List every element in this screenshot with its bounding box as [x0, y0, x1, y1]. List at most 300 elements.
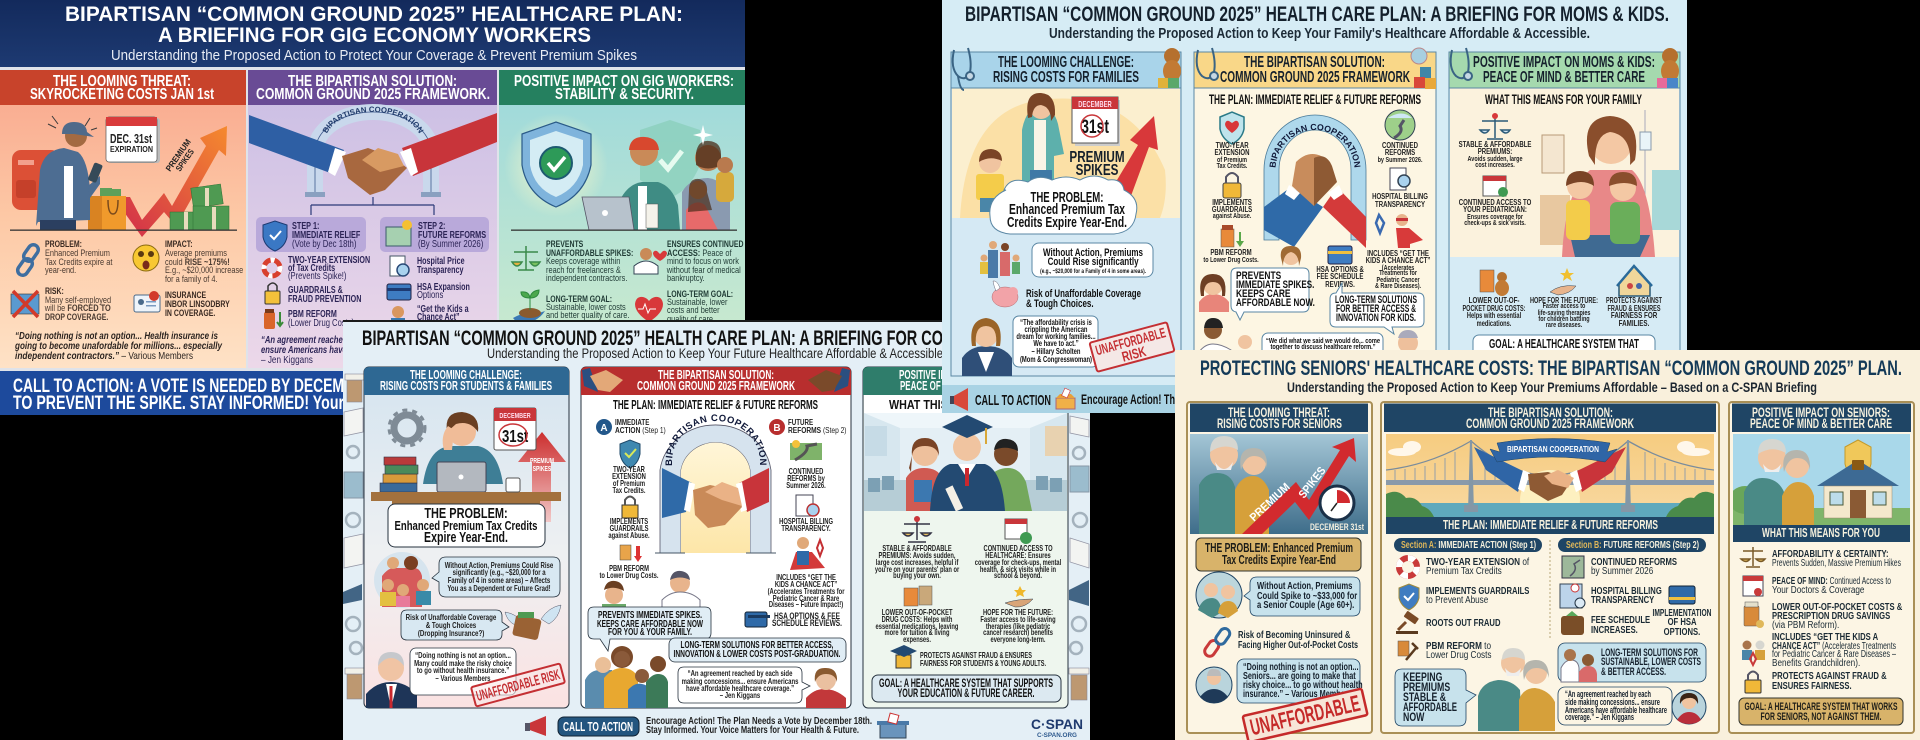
panel: looming challenge	[364, 367, 569, 708]
callout: without action: significantly (e.g., ~$20,000 for a	[453, 567, 546, 577]
icon: pill bottle and coffee	[904, 586, 932, 606]
illustration: clasped hands under arch: BIPARTISAN COOPERATION	[1270, 124, 1360, 168]
plan heading bar: THE PLAN: IMMEDIATE RELIEF & FUTURE REFORMS	[1443, 517, 1658, 532]
reforms right column: TRANSPARENCY	[1375, 199, 1425, 209]
stamp: unaffordable: UNAFFORDABLE	[1248, 690, 1362, 740]
left reform list: PBM REFORM	[288, 308, 337, 319]
title: BIPARTISAN “COMMON GROUND 2025” HEALTH CARE PLAN: A BRIEFING FOR CO	[362, 327, 943, 350]
panel heading: THE LOOMING THREAT:	[53, 73, 191, 90]
callout: long-term solutions: FOR BETTER ACCESS &	[1336, 303, 1416, 315]
badge A: ACTION (Step 1)	[615, 425, 666, 435]
illustration: mom hugging kids in clinic	[1540, 110, 1680, 257]
icon: calendar check	[1005, 519, 1032, 544]
illustration: handshake under cooperation arch	[249, 104, 497, 215]
callout: keeping premiums stable: AFFORDABLE	[1403, 700, 1457, 714]
goal box	[1473, 335, 1655, 375]
text block: problem, impact, risk, insurance: Many self-employed	[45, 294, 111, 305]
benefits text: LONG-TERM GOAL:	[667, 288, 733, 299]
text: hsa options: SCHEDULE REVIEWS.	[772, 618, 842, 628]
quote bubble: risky choice... to go without health	[1243, 679, 1363, 690]
text: risk: Facing Higher Out-of-Pocket Costs	[1238, 639, 1358, 651]
callout: without action: Family of 4 in some areas) – Affects	[448, 575, 550, 585]
left reform list: TWO-YEAR EXTENSION	[288, 254, 370, 265]
reforms left column: against Abuse.	[608, 532, 650, 540]
quote bubble: Many could make the risky choice	[414, 658, 512, 668]
illustration: boy and doctor	[602, 571, 700, 611]
quote bubble: Americans have affordable healthcare	[1565, 705, 1667, 715]
reforms left column: GUARDRAILS	[1212, 204, 1252, 214]
callout: long-term solutions	[1558, 643, 1706, 682]
subheading: WHAT THIS MEANS FOR YOU	[889, 397, 1041, 412]
illustration: smiling senior couple	[1478, 648, 1555, 731]
illustration: stressed student at desk: SPIKES	[533, 465, 551, 473]
benefits text: mind to focus on work	[667, 255, 740, 266]
future reforms list: HOSPITAL BILLING	[1591, 585, 1662, 596]
benefits text: costs and better	[667, 304, 720, 315]
icon: hsa cards	[745, 612, 770, 627]
plan heading: THE PLAN: IMMEDIATE RELIEF & FUTURE REFORMS	[613, 397, 818, 412]
subtitle: Understanding the Proposed Action to Keep Your Future Healthcare Affordable & Accessible	[487, 346, 943, 361]
panel: looming threat	[1187, 402, 1372, 740]
icon: flying piggy bank	[992, 281, 1018, 307]
step 1 box	[256, 217, 366, 252]
panel: positive impact	[1729, 402, 1914, 733]
icon: scales	[1741, 547, 1765, 567]
call to action text: Stay Informed. Your Voice Matters for Your Health & Future.	[646, 725, 859, 736]
quote bubble: Seniors... are going to make that	[1243, 670, 1356, 681]
problem callout: Expire Year-End.	[424, 529, 508, 545]
illustration: shield and gig worker family	[504, 113, 737, 231]
icon: megaphone	[950, 388, 968, 411]
icon: padlock	[1223, 173, 1241, 198]
callout: prevents immediate spikes: AFFORDABLE NOW.	[1236, 297, 1315, 309]
panel heading: POSITIVE IMPACT ON GIG WORKERS:	[514, 73, 734, 90]
panel heading: RISING COSTS FOR FAMILIES	[993, 69, 1139, 86]
step 2 box: FUTURE REFORMS	[418, 229, 486, 240]
callout: prevents immediate spikes: KEEPS CARE AFFORDABLE NOW	[597, 619, 703, 630]
text block: problem, impact, risk, insurance: Average premiums	[165, 247, 227, 258]
icon: header handshake left	[582, 368, 623, 392]
benefits in blue panel: FAIRNESS FOR	[1611, 310, 1658, 320]
callout: keeping premiums stable	[1395, 669, 1476, 726]
icon: superhero with ribbon	[1376, 214, 1423, 248]
reforms left column: Tax Credits.	[613, 487, 646, 495]
callout: prevents immediate spikes: PREVENTS	[1236, 270, 1281, 282]
illustration: mom portrait	[1199, 274, 1229, 312]
text block: problem, impact, risk, insurance: could RISE ~175%!	[165, 256, 230, 267]
title banner: BIPARTISAN “COMMON GROUND 2025” HEALTHCARE PLAN:	[65, 3, 683, 26]
future reforms list: FEE SCHEDULE	[1591, 614, 1650, 625]
illustration: worried seniors and premium spike arrow	[1190, 434, 1368, 534]
title banner: A BRIEFING FOR GIG ECONOMY WORKERS	[158, 24, 591, 47]
illustration: doctor	[1272, 246, 1309, 300]
icon: senior couple portrait	[1196, 572, 1242, 618]
quote: independent contractors.” – Various Members	[15, 350, 193, 362]
immediate action list: ROOTS OUT FRAUD	[1426, 617, 1501, 628]
panel heading	[1750, 405, 1892, 431]
illustration: worried seniors and premium spike arrow: SPIKES	[1297, 465, 1329, 501]
callout: long-term solutions	[669, 638, 846, 662]
icon: wallet	[1561, 611, 1584, 635]
reforms left column: GUARDRAILS	[610, 525, 649, 533]
reforms left column: EXTENSION	[612, 473, 646, 481]
calendar: 31st	[1081, 116, 1109, 138]
quote bubble: “Doing nothing is not an option...	[1243, 661, 1358, 672]
problem box: THE PROBLEM: Enhanced Premium	[1205, 540, 1353, 555]
left reform list	[264, 254, 370, 329]
icon: ballot box	[877, 713, 909, 738]
stamp: unaffordable risk: UNAFFORDABLE RISK	[475, 667, 562, 705]
problem box	[1196, 538, 1361, 571]
panel: bipartisan solution	[248, 70, 497, 368]
callout: without action: Without Action, Premiums	[1043, 247, 1143, 259]
calendar: EXPIRATION	[110, 144, 153, 154]
text block: problem, impact, risk, insurance: DROP COVERAGE.	[45, 311, 108, 322]
badge A: A	[600, 423, 608, 434]
benefits text: buying your own.	[893, 572, 941, 580]
icon: hospital with magnifier	[1560, 584, 1585, 608]
benefits list	[1741, 547, 1903, 693]
panel heading: RISING COSTS FOR SENIORS	[1217, 416, 1342, 431]
reforms right column: (Accelerates	[1382, 264, 1415, 272]
benefits list: PROTECTS AGAINST FRAUD &	[1772, 670, 1887, 681]
goal box: GOAL: A HEALTHCARE SYSTEM THAT SUPPORTS	[879, 678, 1053, 690]
reforms right column: KIDS A CHANCE ACT”	[775, 581, 837, 589]
icon: shield clock	[263, 221, 287, 251]
quote bubble: insurance.” – Various Members	[1243, 688, 1352, 699]
quote bubble: together to discuss healthcare reform.”	[1270, 342, 1376, 351]
subtitle: Understanding the Proposed Action to Keep Your Family's Healthcare Affordable & Accessible.	[1049, 25, 1590, 42]
reforms right column: CONTINUED	[789, 468, 823, 476]
text block: problem, impact, risk, insurance: year-end.	[45, 264, 76, 275]
text block: problem, impact, risk, insurance: INSURANCE	[165, 289, 207, 300]
icon: shield heart	[1220, 112, 1244, 144]
callout: without action	[1032, 243, 1153, 277]
callout: keeping premiums stable: PREMIUMS	[1403, 681, 1450, 694]
problem cloud	[990, 176, 1137, 234]
benefits in blue panel: LOWER OUT-OF-	[1469, 295, 1520, 305]
callout: without action: (e.g., ~$20,000 for a Family of 4 in some areas).	[1040, 268, 1146, 275]
icon: politician portrait	[1196, 667, 1232, 703]
icon: broken chain	[1203, 627, 1232, 658]
card: gig economy workers briefing	[0, 0, 745, 415]
goal box: GOAL: A HEALTHCARE SYSTEM THAT	[1489, 336, 1639, 351]
panel heading	[514, 75, 733, 99]
callout: keeping premiums stable: NOW	[1403, 711, 1424, 724]
illustration: doctor and patient	[1561, 649, 1597, 682]
reforms right column: Pediatric Cancer	[1377, 276, 1420, 284]
problem callout	[388, 504, 545, 547]
reforms left column: to Lower Drug Costs.	[599, 572, 659, 580]
illustration: worried gig worker with rising premium arrow	[10, 116, 237, 237]
callout: long-term solutions: INNOVATION FOR KIDS.	[1336, 312, 1416, 324]
quote	[14, 330, 223, 362]
illustration: handshake under arch	[655, 414, 776, 554]
callout: long-term solutions: INNOVATION & LOWER COSTS POST-GRADUATION.	[674, 648, 841, 660]
callout: without action	[1244, 577, 1360, 616]
benefits text: CONTINUED ACCESS TO	[984, 545, 1053, 553]
illustration: worried gig worker with rising premium arrow: PREMIUM	[163, 137, 193, 173]
problem box: Tax Credits Expire Year-End	[1222, 552, 1336, 567]
text block: problem, impact, risk, insurance: E.g., ~$20,000 increase	[165, 264, 244, 275]
panel heading: SKYROCKETING COSTS JAN 1st	[30, 86, 214, 103]
quote: “An agreement reached by each side making	[261, 334, 425, 345]
panel: bipartisan solution	[1381, 402, 1719, 733]
callout: without action: Without Action, Premiums Could Rise	[445, 560, 553, 570]
right reform list: Options	[417, 289, 444, 300]
future reforms list	[1560, 556, 1712, 637]
benefits text: expenses.	[903, 636, 931, 644]
subheading: WHAT THIS MEANS FOR YOUR FAMILY	[1485, 91, 1642, 107]
reforms right column: HSA OPTIONS &	[1316, 264, 1364, 274]
panel heading	[993, 54, 1139, 86]
text block: problem, impact, risk, insurance: IMPACT:	[165, 238, 193, 249]
benefits in blue panel: FAMILIES.	[1619, 318, 1649, 328]
future reforms list: CONTINUED REFORMS	[1591, 556, 1677, 567]
panel heading	[1466, 405, 1634, 431]
reforms right column: CONTINUED	[1382, 140, 1418, 150]
future reforms list: IMPLEMENTATION	[1652, 607, 1712, 619]
callout: long-term solutions: LONG-TERM SOLUTIONS FOR	[1601, 647, 1698, 659]
reforms left column: Tax Credits.	[1217, 162, 1248, 170]
quote: ensure Americans have affordable coverage.”	[261, 344, 428, 355]
benefits text: bankruptcy.	[667, 272, 705, 283]
badge B: FUTURE	[788, 417, 813, 427]
section B pill	[1558, 538, 1706, 552]
reforms left column: TWO-YEAR	[613, 466, 645, 474]
reforms right column: INCLUDES “GET THE	[776, 574, 836, 582]
icon: stethoscope	[953, 48, 974, 90]
benefits text: ENSURES CONTINUED	[667, 238, 744, 249]
call to action text: Encourage Action! The Plan Needs a Vote by December 18th.	[646, 716, 872, 727]
benefits text: PREMIUMS: Avoids sudden,	[879, 552, 956, 560]
calendar: DEC. 31st	[110, 131, 152, 146]
icon: teddy bear with blocks	[1158, 48, 1181, 88]
icon: shield	[620, 440, 640, 468]
text block: problem, impact, risk, insurance: PROBLEM:	[45, 238, 82, 249]
step 1 box: (Vote by Dec 18th)	[292, 238, 357, 249]
step 2 box: (By Summer 2026)	[418, 238, 483, 249]
benefits in blue panel: Faster access to	[1543, 302, 1585, 310]
section A pill	[1394, 538, 1542, 552]
reforms left column	[599, 440, 659, 580]
illustration: doctor and child	[1199, 318, 1252, 380]
title banner: Understanding the Proposed Action to Protect Your Coverage & Prevent Premium Spikes	[111, 47, 637, 64]
stamp: unaffordable risk	[471, 663, 565, 707]
icon: padlock	[265, 283, 280, 304]
right reform list	[387, 255, 470, 324]
right reform list: Chance Act”	[417, 311, 460, 322]
reforms left column: PBM REFORM	[609, 565, 649, 573]
benefits list: PRESCRIPTION DRUG SAVINGS	[1772, 610, 1890, 621]
panel heading	[1220, 54, 1410, 86]
icon: padlock	[622, 496, 638, 518]
icon: scales	[512, 246, 540, 270]
benefits in cream panel: Avoids sudden, large	[1468, 155, 1523, 163]
benefits in blue panel: Helps with essential	[1467, 312, 1521, 320]
icon: scales heart	[1480, 113, 1510, 139]
icon: roadmap	[1562, 556, 1584, 578]
icon: stethoscope	[1451, 48, 1472, 80]
quote bubble: “An agreement reached by each side	[688, 669, 792, 678]
step 1 box: STEP 1:	[292, 220, 320, 231]
icon: shield	[1399, 584, 1419, 610]
panel heading	[256, 75, 490, 99]
icon: hsa card	[1669, 586, 1695, 604]
reforms right column: REFORMS	[1385, 147, 1415, 157]
quote bubble	[1237, 659, 1363, 703]
step 2 box	[380, 217, 489, 252]
reforms right column: INCLUDES “GET THE	[1367, 248, 1429, 258]
problem cloud: Credits Expire Year-End.	[1007, 215, 1127, 231]
immediate action list: to Prevent Abuse	[1426, 593, 1488, 605]
reforms left column	[1203, 112, 1259, 264]
benefits list: INCLUDES “GET THE KIDS A	[1772, 631, 1878, 642]
left reform list: GUARDRAILS &	[288, 284, 343, 295]
call to action bar: CALL TO ACTION	[975, 392, 1051, 409]
icon: pill bottle	[1221, 225, 1244, 247]
right reform list: Transparency	[417, 264, 464, 275]
callout: prevents immediate spikes: KEEPS CARE	[1236, 288, 1291, 300]
benefits list: ENSURES FAIRNESS.	[1772, 680, 1852, 691]
benefits text: coverage for check-ups, mental	[975, 559, 1061, 567]
title: BIPARTISAN “COMMON GROUND 2025” HEALTH CARE PLAN: A BRIEFING FOR MOMS & KIDS.	[965, 3, 1669, 26]
quote bubble: coverage.” – Jen Kiggans	[1565, 712, 1634, 722]
immediate action list: Premium Tax Credits	[1426, 564, 1502, 576]
illustration: jen kiggans	[806, 668, 846, 708]
reforms left column: against Abuse.	[1213, 212, 1251, 220]
quote bubble: crippling the American	[1024, 326, 1088, 334]
immediate action list	[1396, 555, 1530, 660]
benefits text: therapies (like pediatric	[986, 623, 1050, 631]
benefits in cream panel: CONTINUED ACCESS TO	[1459, 197, 1532, 207]
icon: family house	[1617, 266, 1652, 296]
benefits text: essential medications, leaving	[876, 623, 958, 631]
panel heading: POSITIVE IMPACT ON MOMS & KIDS:	[1473, 54, 1655, 71]
call to action band: TO PREVENT THE SPIKE. STAY INFORMED! Your	[13, 393, 344, 414]
callout: without action: Without Action, Premiums	[1257, 580, 1352, 591]
benefits in blue panel: medications.	[1477, 320, 1511, 328]
benefits text: and better quality of care.	[546, 309, 629, 320]
callout: without action: You as a Dependent or Future Grad!	[447, 583, 551, 593]
benefits text: Keeps coverage within	[546, 255, 621, 266]
stamp: unaffordable risk: RISK	[1120, 343, 1148, 365]
quote bubble	[678, 667, 810, 703]
illustration: worried mother with child: SPIKES	[1076, 160, 1118, 178]
illustration: handshake under arch: BIPARTISAN COOPERATION	[666, 414, 766, 466]
panel: positive impact	[1449, 48, 1680, 376]
immediate action list: TWO-YEAR EXTENSION of	[1426, 555, 1530, 567]
benefits text: quality of care.	[667, 313, 715, 324]
benefits text: HOPE FOR THE FUTURE:	[983, 609, 1053, 617]
callout: risk of unaffordable coverage: (Dropping Insurance?)	[418, 628, 485, 638]
callout: long-term solutions: SUSTAINABLE, LOWER COSTS	[1601, 656, 1701, 668]
reforms left column: of Premium	[1217, 156, 1247, 164]
callout: without action: Could Spike to ~$33,000 for	[1257, 590, 1358, 601]
icon: map with sun	[386, 220, 412, 246]
reforms right column: KIDS A CHANCE ACT”	[1366, 255, 1431, 265]
icon: bill magnifier	[1390, 168, 1410, 190]
reforms left column: EXTENSION	[1215, 147, 1249, 157]
text block: problem, impact, risk, insurance: Tax Credits expire at	[45, 256, 113, 267]
reforms right column: REFORMS by	[787, 475, 825, 483]
right reform list: Hospital Price	[417, 255, 465, 266]
badge B: B	[773, 423, 781, 434]
call to action band	[0, 371, 343, 415]
reforms right column: (Accelerates Treatments for	[768, 588, 845, 596]
calendar	[1072, 97, 1120, 146]
left reform list: (Lower Drug Costs)	[288, 317, 354, 328]
badge B	[769, 417, 847, 435]
callout: long-term solutions	[1330, 283, 1424, 334]
quote bubble	[1558, 687, 1672, 725]
callout: long-term solutions: LONG-TERM SOLUTIONS FOR BETTER ACCESS,	[680, 639, 834, 651]
benefits text: health, & sick visits while in	[980, 566, 1056, 574]
illustration: worried gig worker with rising premium arrow: SPIKES	[173, 147, 196, 173]
reforms right column: TRANSPARENCY.	[781, 525, 831, 533]
problem cloud: THE PROBLEM:	[1030, 189, 1104, 206]
problem cloud: Enhanced Premium Tax	[1009, 202, 1125, 218]
calendar: 31st	[502, 427, 529, 447]
benefits list: Your Doctors & Coverage	[1772, 583, 1864, 595]
illustration: worried seniors and premium spike arrow: DECEMBER 31st	[1310, 522, 1364, 532]
benefits text	[512, 238, 744, 325]
quote bubble	[1013, 316, 1098, 367]
quote bubble: dream for working families...	[1016, 333, 1096, 341]
illustration: worried mother with child: PREMIUM	[1069, 147, 1125, 165]
benefits in cream panel: cost increases.	[1475, 161, 1515, 169]
icon: hand with star	[1005, 586, 1033, 607]
callout: risk of unaffordable coverage: & Tough Choices	[426, 620, 476, 630]
illustration: graduate with friends in hospital	[864, 413, 1067, 511]
benefits text: DRUG COSTS: Helps with	[882, 616, 952, 624]
reforms right column	[768, 440, 845, 609]
future reforms list: by Summer 2026	[1591, 564, 1653, 576]
icon: superhero child with ribbon	[790, 537, 825, 570]
benefits text: LONG-TERM GOAL:	[546, 293, 612, 304]
benefits text	[875, 516, 1061, 668]
icon: gavel	[1396, 611, 1419, 634]
panel heading	[1473, 54, 1655, 86]
icon: plant in hand	[513, 289, 545, 320]
reforms left column: PBM REFORM	[1210, 247, 1252, 257]
reforms left column: IMPLEMENTS	[1212, 197, 1252, 207]
panel heading	[637, 368, 795, 393]
benefits text: without fear of medical	[666, 264, 741, 275]
logo: C-SPAN: C·SPAN	[1031, 716, 1083, 732]
benefits text: large cost increases, helpful if	[876, 559, 959, 567]
step 1 box: IMMEDIATE RELIEF	[292, 229, 361, 240]
benefits text: FAIRNESS FOR STUDENTS & YOUNG ADULTS.	[920, 658, 1046, 668]
panel heading: STABILITY & SECURITY.	[555, 86, 694, 103]
section A pill: Section A: IMMEDIATE ACTION (Step 1)	[1401, 539, 1536, 551]
problem callout: THE PROBLEM:	[424, 504, 508, 521]
illustration: handshake on bridge	[1386, 434, 1714, 530]
illustration: worried seniors and premium spike arrow: PREMIUM	[1248, 481, 1293, 524]
panel heading: THE LOOMING CHALLENGE:	[998, 54, 1134, 71]
reforms right column: HOSPITAL BILLING	[1372, 191, 1428, 201]
callout: risk of unaffordable coverage	[401, 610, 509, 640]
stamp: unaffordable risk: UNAFFORDABLE	[1094, 324, 1167, 358]
panel heading: COMMON GROUND 2025 FRAMEWORK	[1466, 416, 1634, 431]
text block: problem, impact, risk, insurance: Enhanced Premium	[45, 247, 110, 258]
future reforms list: INCREASES.	[1591, 624, 1638, 635]
text block: problem, impact, risk, insurance: INBOR LINSODBRY	[165, 298, 230, 309]
quote	[261, 336, 343, 365]
benefits list: Benefits Grandchildren).	[1772, 656, 1860, 668]
illustration: hillary scholten	[962, 318, 1012, 376]
panel heading: PEACE OF MIND & BETTER CARE	[900, 379, 1030, 393]
